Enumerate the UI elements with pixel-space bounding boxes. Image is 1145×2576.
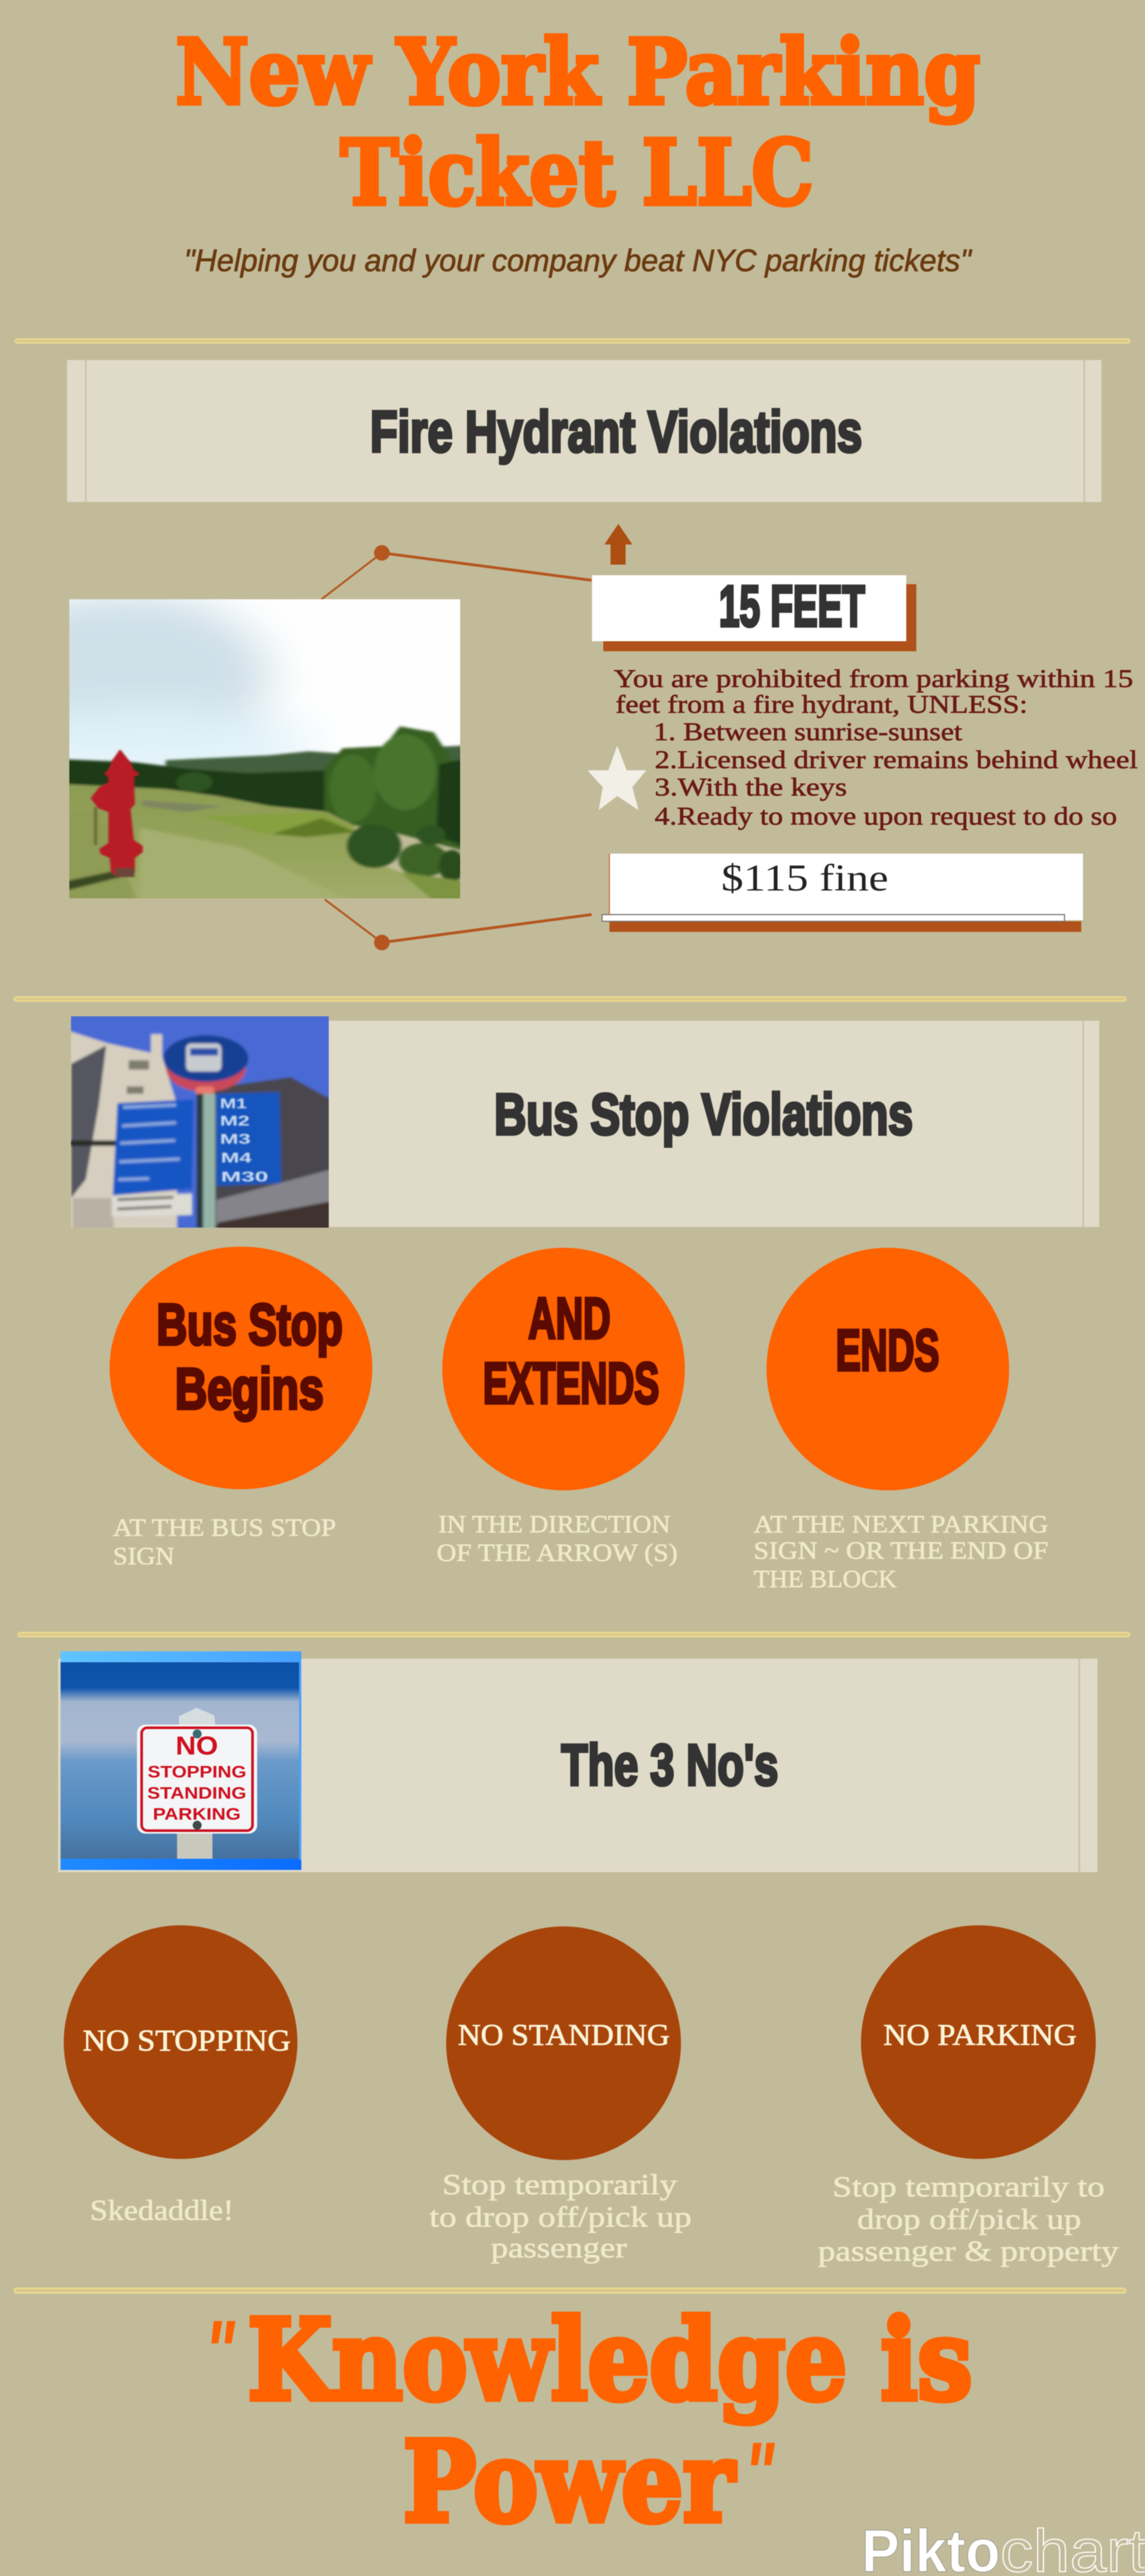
route numbers on sign [220, 1096, 268, 1185]
caption: skedaddle: Skedaddle! [90, 2195, 234, 2227]
caption: at the next parking sign [754, 1510, 1048, 1593]
tagline: "Helping you and your company beat NYC parking tickets" [184, 243, 972, 278]
step: bus stop begins: Begins [175, 1357, 324, 1422]
caption: no standing meaning: to drop off/pick up [429, 2201, 692, 2233]
caption: in the direction of the arrow [437, 1510, 678, 1566]
title: New York Parking [176, 20, 980, 125]
closing quote: " [744, 2423, 775, 2523]
route numbers on sign: M2 [220, 1113, 250, 1129]
connector: upper line [321, 545, 592, 599]
sign lettering [147, 1731, 247, 1824]
caption: no parking meaning: passenger & property [818, 2236, 1119, 2267]
text block: hydrant rules: 4.Ready to move upon request to do so [655, 802, 1117, 830]
caption: in the direction of the arrow: OF THE ARROW (S) [437, 1539, 678, 1566]
circle: no stopping: NO STOPPING [83, 2024, 291, 2057]
icon: star [588, 746, 646, 810]
heading: bus stop violations: Bus Stop Violations [494, 1082, 913, 1147]
panel: fire hydrant violations header [67, 360, 1101, 502]
route numbers on sign: M30 [221, 1169, 268, 1185]
step: and extends: AND [528, 1286, 611, 1351]
caption: no parking meaning [818, 2171, 1119, 2267]
text block: hydrant rules: feet from a fire hydrant, UNLESS: [616, 690, 1028, 718]
photo: no stopping standing parking sign [60, 1651, 302, 1870]
title [176, 20, 980, 225]
caption: no standing meaning: Stop temporarily [442, 2169, 677, 2201]
caption: at the next parking sign: AT THE NEXT PARKING [754, 1510, 1048, 1538]
photo: bus stop sign [70, 1016, 329, 1228]
title: Ticket LLC [340, 120, 813, 225]
circle: no stopping [64, 1925, 297, 2159]
callout: $115 fine [602, 854, 1083, 932]
text block: hydrant rules [614, 664, 1138, 830]
callout: 15 feet [592, 574, 916, 651]
circle: no standing: NO STANDING [458, 2018, 670, 2052]
step: and extends [442, 1248, 685, 1490]
step: bus stop begins [110, 1247, 372, 1489]
circle: no standing [446, 1926, 681, 2160]
caption: at the next parking sign: SIGN ~ OR THE END OF [754, 1537, 1048, 1564]
callout: 15 feet: 15 FEET [719, 574, 865, 639]
text block: hydrant rules: 3.With the keys [655, 773, 847, 801]
icon: up arrow [604, 524, 632, 565]
panel: the 3 no's header [58, 1659, 1097, 1872]
closing quote: Power [403, 2417, 735, 2547]
photo: fire hydrant in a field [69, 599, 461, 899]
watermark: piktochart [862, 2517, 1145, 2576]
caption: no parking meaning: Stop temporarily to [832, 2171, 1105, 2203]
caption: at the bus stop sign: SIGN [113, 1542, 174, 1570]
sign lettering: PARKING [153, 1805, 241, 1824]
closing quote: Knowledge is [248, 2295, 972, 2425]
step: ends: ENDS [836, 1318, 939, 1383]
caption: no standing meaning: passenger [491, 2232, 627, 2264]
panel: bus stop violations header [329, 1021, 1099, 1227]
step: ends [767, 1248, 1009, 1490]
heading: fire hydrant violations: Fire Hydrant Violations [370, 400, 862, 465]
sign lettering: NO [176, 1731, 218, 1760]
closing quote: " [205, 2302, 236, 2402]
caption: at the bus stop sign: AT THE BUS STOP [113, 1514, 336, 1541]
sign lettering: STANDING [147, 1784, 247, 1802]
route numbers on sign: M4 [221, 1150, 252, 1166]
circle: no parking [861, 1925, 1096, 2159]
closing quote [205, 2295, 972, 2547]
caption: no standing meaning [429, 2169, 692, 2264]
text block: hydrant rules: You are prohibited from parking within 15 [614, 664, 1133, 693]
circle: no parking: NO PARKING [883, 2018, 1077, 2052]
route numbers on sign: M1 [220, 1096, 247, 1112]
route numbers on sign: M3 [220, 1131, 250, 1147]
sign lettering: STOPPING [148, 1763, 247, 1781]
connector: lower line [325, 899, 592, 950]
step: bus stop begins: Bus Stop [157, 1292, 343, 1357]
text block: hydrant rules: 2.Licensed driver remains behind wheel [655, 745, 1138, 774]
heading: the 3 no's: The 3 No's [561, 1733, 778, 1798]
caption: in the direction of the arrow: IN THE DIRECTION [438, 1510, 670, 1538]
caption: at the next parking sign: THE BLOCK [754, 1565, 897, 1593]
caption: at the bus stop sign [113, 1514, 336, 1570]
callout: $115 fine: $115 fine [721, 856, 888, 899]
caption: no parking meaning: drop off/pick up [857, 2204, 1081, 2236]
step: and extends: EXTENDS [483, 1351, 659, 1416]
text block: hydrant rules: 1. Between sunrise-sunset [654, 717, 962, 746]
